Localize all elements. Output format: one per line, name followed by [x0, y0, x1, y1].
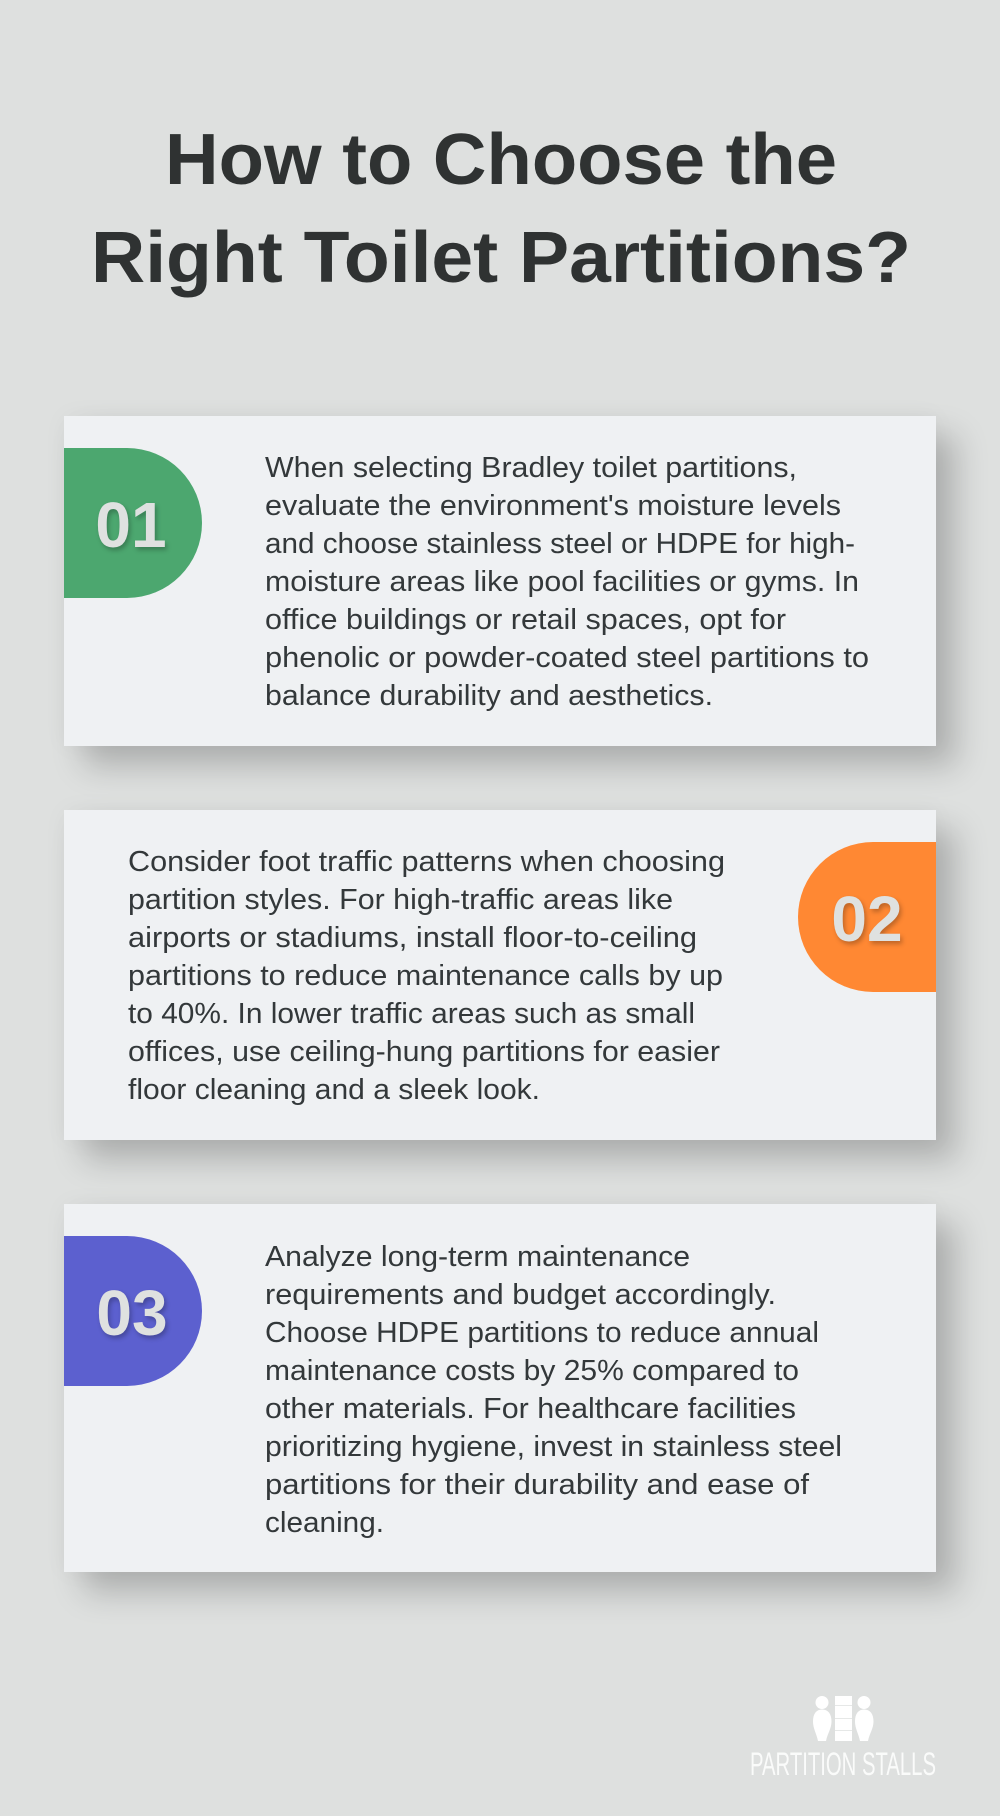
icon: left person [813, 1696, 832, 1741]
text: step 01 body [265, 452, 869, 712]
badge: 02: 02 [831, 883, 903, 955]
text: step 02 body: to 40%. In lower traffic areas such as small [128, 998, 695, 1030]
badge: 01 [64, 448, 202, 598]
badge: 03: 03 [96, 1277, 168, 1349]
text: step 02 body: partition styles. For high-traffic areas like [128, 884, 673, 916]
text: step 01 body: phenolic or powder-coated steel partitions to [265, 642, 869, 674]
title: How to Choose the [165, 120, 837, 200]
text: step 01 body: moisture areas like pool facilities or gyms. In [265, 566, 859, 598]
panel: step 01 [64, 416, 936, 746]
text: step 03 body: partitions for their durability and ease of [265, 1469, 809, 1501]
text: step 01 body: When selecting Bradley toilet partitions, [265, 452, 797, 484]
text: step 03 body: cleaning. [265, 1507, 384, 1539]
text: step 02 body: floor cleaning and a sleek look. [128, 1074, 540, 1106]
text: step 02 body: offices, use ceiling-hung partitions for easier [128, 1036, 721, 1068]
icon: partition panels [835, 1696, 852, 1741]
text: step 01 body: and choose stainless steel or HDPE for high- [265, 528, 855, 560]
text: step 02 body: Consider foot traffic patterns when choosing [128, 846, 725, 878]
icon: right person [855, 1696, 874, 1741]
logo: Partition Stalls [750, 1696, 936, 1782]
panel: step 02 [64, 810, 936, 1140]
text: step 03 body: maintenance costs by 25% compared to [265, 1355, 799, 1387]
badge: 02 [798, 842, 936, 992]
title [91, 120, 911, 298]
text: step 03 body [265, 1241, 842, 1539]
title: Right Toilet Partitions? [91, 218, 911, 298]
text: step 03 body: Choose HDPE partitions to reduce annual [265, 1317, 819, 1349]
text: step 03 body: requirements and budget accordingly. [265, 1279, 776, 1311]
text: step 01 body: evaluate the environment's moisture levels [265, 490, 841, 522]
text: step 03 body: other materials. For healthcare facilities [265, 1393, 796, 1425]
text: step 01 body: office buildings or retail spaces, opt for [265, 604, 787, 636]
text: step 02 body: partitions to reduce maintenance calls by up [128, 960, 723, 992]
badge: 03 [64, 1236, 202, 1386]
text: step 02 body: airports or stadiums, install floor-to-ceiling [128, 922, 697, 954]
panel: step 03 [64, 1204, 936, 1572]
text: step 01 body: balance durability and aesthetics. [265, 680, 713, 712]
text: step 03 body: prioritizing hygiene, invest in stainless steel [265, 1431, 842, 1463]
badge: 01: 01 [95, 489, 167, 561]
text: step 02 body [128, 846, 725, 1106]
text: step 03 body: Analyze long-term maintenance [265, 1241, 690, 1273]
